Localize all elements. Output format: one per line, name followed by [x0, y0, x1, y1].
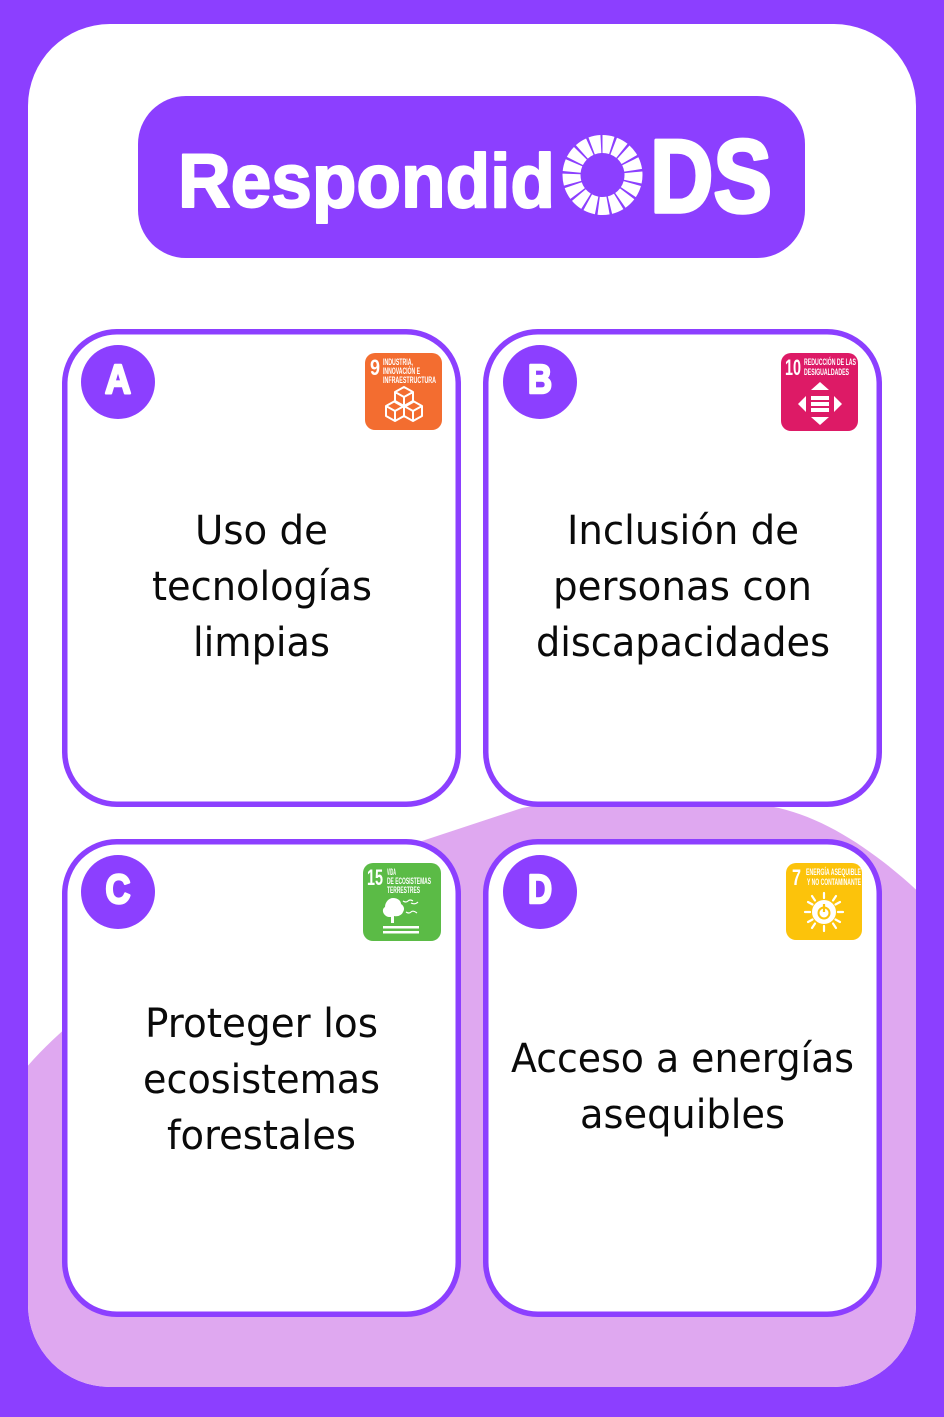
badge C: C — [106, 866, 130, 912]
text: Proteger los ecosistemas forestales: Proteger los — [145, 999, 378, 1047]
lilac background shape — [20, 796, 925, 1400]
icon: SDG 15 tile — [363, 863, 441, 941]
text: Proteger los ecosistemas forestales — [143, 999, 380, 1159]
icon: SDG 7 tile: 7 — [792, 865, 801, 890]
icon: SDG 9 tile — [365, 353, 442, 430]
badge C — [81, 855, 155, 929]
badge D — [503, 855, 577, 929]
text: Acceso a energías asequibles: Acceso a energías — [511, 1034, 854, 1082]
icon: SDG 9 tile: INDUSTRIA, — [383, 357, 413, 367]
icon: SDG 7 tile: ENERGÍA ASEQUIBLE — [806, 867, 861, 877]
icon: SDG 15 tile: DE ECOSISTEMAS — [387, 876, 431, 886]
badge B — [503, 345, 577, 419]
text: Uso de tecnologías limpias: Uso de — [195, 506, 328, 554]
icon: SDG 9 tile: INFRAESTRUCTURA — [383, 375, 436, 385]
panel: card C — [65, 842, 458, 1314]
icon: SDG 9 tile: 9 — [370, 355, 380, 380]
badge B: B — [528, 356, 552, 402]
icon: SDG wheel — [572, 144, 634, 206]
icon: SDG 7 tile: Y NO CONTAMINANTE — [807, 877, 861, 887]
icon: SDG 10 tile: DESIGUALDADES — [804, 367, 849, 377]
title text: DS: DS — [650, 119, 772, 235]
text: Proteger los ecosistemas forestales: forestales — [167, 1111, 356, 1159]
panel: card D — [486, 842, 879, 1314]
icon: SDG 10 tile: 10 — [785, 355, 801, 380]
text: Uso de tecnologías limpias: limpias — [193, 618, 330, 666]
text: Uso de tecnologías limpias — [152, 506, 372, 666]
text: Inclusión de personas con discapacidades — [536, 506, 830, 666]
badge A: A — [105, 356, 131, 402]
icon: SDG 15 tile: 15 — [367, 865, 383, 890]
title banner — [138, 96, 805, 258]
badge A — [81, 345, 155, 419]
panel: card B — [486, 332, 879, 804]
icon: SDG 15 tile: VIDA — [387, 867, 396, 877]
icon: SDG 10 tile: REDUCCIÓN DE LAS — [804, 356, 856, 367]
title text: Respondid: Respondid — [178, 139, 555, 224]
text: Inclusión de personas con discapacidades: Inclusión de — [567, 506, 799, 554]
icon: SDG 7 tile — [786, 863, 862, 940]
text: Uso de tecnologías limpias: tecnologías — [152, 562, 372, 610]
text: Proteger los ecosistemas forestales: ecosistemas — [143, 1055, 380, 1103]
panel: card A — [65, 332, 458, 804]
text: Inclusión de personas con discapacidades: personas con — [553, 562, 812, 610]
icon: SDG 10 tile — [781, 353, 858, 431]
badge D: D — [528, 866, 552, 912]
icon: SDG 9 tile: INNOVACIÓN E — [383, 365, 420, 376]
icon: SDG 15 tile: TERRESTRES — [387, 885, 420, 895]
text: Acceso a energías asequibles: asequibles — [580, 1090, 785, 1138]
text: Inclusión de personas con discapacidades: discapacidades — [536, 618, 830, 666]
text: Acceso a energías asequibles — [511, 1034, 854, 1138]
